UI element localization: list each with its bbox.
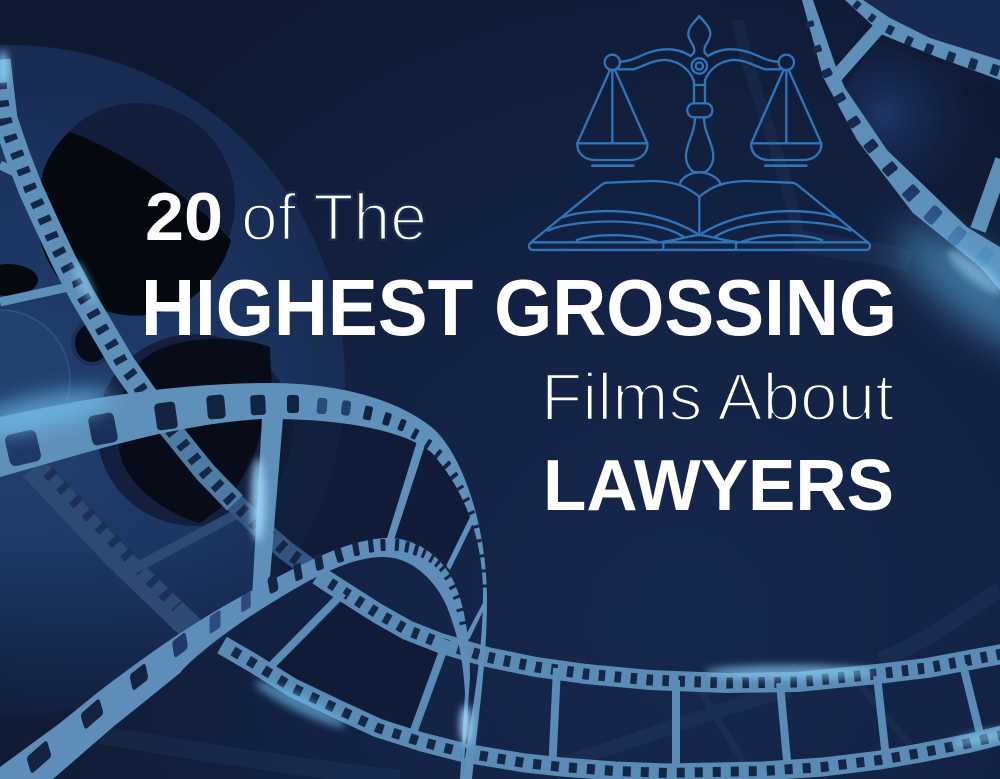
title line: films about: Films About	[541, 360, 894, 435]
dark film frames	[269, 40, 1000, 733]
reel upper cut-out surround	[56, 103, 235, 238]
sprocket holes	[805, 0, 1000, 269]
title line: highest grossing: HIGHEST GROSSING	[141, 263, 897, 352]
top right corner tint	[863, 0, 1000, 60]
main film strip upper curve	[0, 383, 487, 779]
bright upper part	[0, 60, 155, 410]
frame dividers	[252, 418, 486, 640]
sprocket holes	[0, 83, 315, 572]
film strip running from top left behind the main strip	[0, 60, 315, 572]
title	[141, 179, 897, 526]
sprocket holes	[4, 394, 487, 588]
title line: lawyers: LAWYERS	[543, 446, 894, 526]
icon: right arm and pan	[705, 49, 821, 166]
reel left cut-out	[0, 264, 38, 296]
icon: open book	[529, 181, 870, 250]
mid part under the main strip	[155, 410, 235, 503]
reel disc	[0, 45, 345, 715]
reel hub hole	[73, 322, 111, 364]
film strip lower edge to the right	[222, 645, 1000, 773]
film strip top right	[802, 0, 1000, 290]
icon: pivot	[692, 58, 707, 74]
frame dividers	[0, 165, 73, 302]
reel lower cut-out surround	[97, 334, 293, 526]
main film strip lower curve	[0, 538, 470, 779]
reel upper cut-out	[37, 132, 231, 316]
film reel	[0, 45, 345, 715]
title line: 20: 20	[145, 179, 223, 255]
reel lower cut-out	[118, 339, 272, 523]
dim film strip lower left	[33, 468, 248, 632]
film strip upper lower-right run	[270, 575, 1000, 775]
title line: of The: of The	[241, 180, 427, 254]
sprocket holes	[26, 539, 467, 774]
frame dividers	[270, 593, 982, 775]
icon: left arm and pan	[577, 49, 693, 166]
icon: scales of justice on open book	[529, 16, 870, 250]
dim part	[235, 503, 315, 572]
reel hub ring	[0, 309, 71, 400]
icon: scale finial	[688, 16, 710, 56]
icon: scale column	[679, 80, 721, 185]
top right frame glow	[845, 40, 1000, 227]
